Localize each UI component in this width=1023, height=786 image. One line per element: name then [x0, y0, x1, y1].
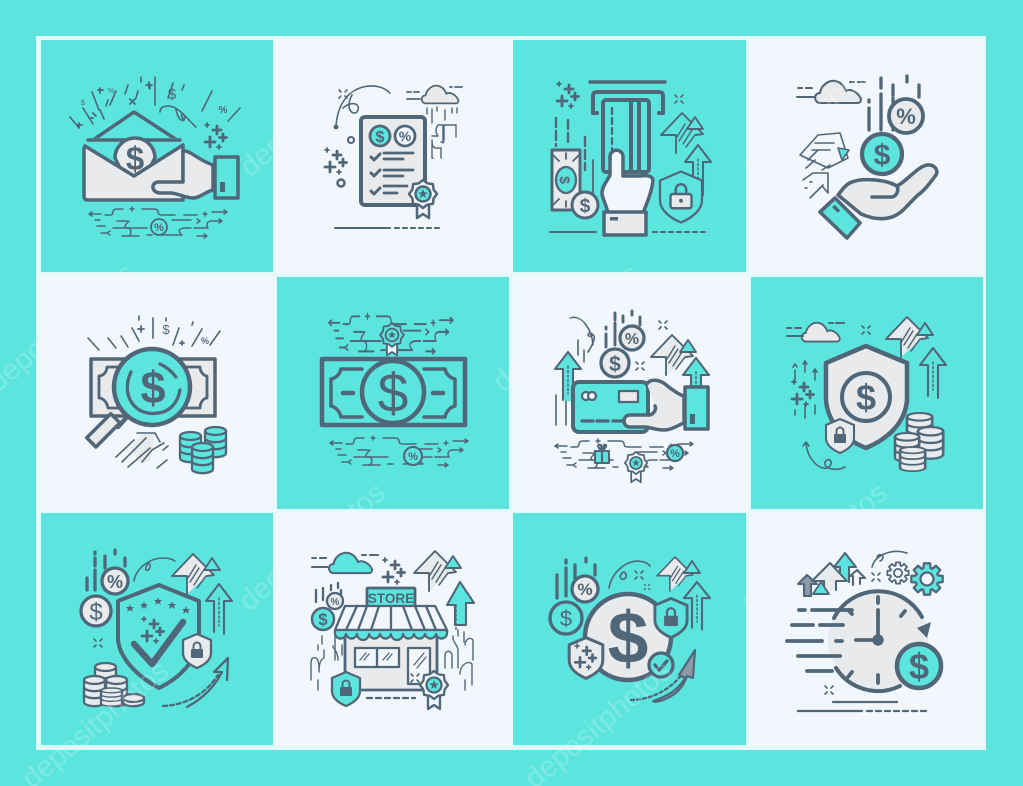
icon: shield with checkmark: %	[107, 572, 123, 592]
envelope body	[84, 145, 183, 200]
icon: card in ATM slot with hand: $	[557, 176, 573, 184]
icon: store front: %	[331, 597, 340, 608]
icon: banknote: $	[378, 362, 408, 424]
money coin	[115, 138, 155, 176]
icon: envelope with money in hand: $	[126, 140, 144, 177]
watermark text: depositphotos	[233, 477, 392, 617]
icon: card in ATM slot with hand: $	[580, 196, 591, 217]
icon: magnifier over banknote: %	[201, 336, 209, 346]
icon: envelope with money in hand: %	[108, 88, 114, 95]
hand	[153, 151, 213, 198]
icon: clock with fast lines: $	[909, 646, 929, 687]
cuff	[215, 157, 238, 198]
icon: banknote	[322, 314, 468, 467]
icon: shield with coin and stacks	[787, 317, 946, 471]
icon: magnifier over banknote: $	[162, 322, 170, 337]
icon: banknote: %	[408, 451, 418, 463]
icon: credit card in hand: %	[625, 331, 639, 348]
envelope back flap	[93, 112, 177, 140]
watermark text: depositphotos	[234, 43, 393, 183]
icon: store front: STORE	[368, 591, 414, 606]
icon: credit card in hand: $	[609, 353, 621, 376]
icon: card in ATM slot with hand	[550, 82, 711, 235]
icon: hand holding coins: %	[896, 104, 916, 129]
icon: clock with fast lines	[787, 551, 943, 711]
icon: shield with coin and stacks: $	[856, 377, 876, 418]
icon: document checklist with badge: %	[399, 128, 412, 144]
icon: envelope with money in hand	[70, 77, 240, 238]
watermark text: depositphotos	[735, 477, 894, 617]
icon: hand holding coins: $	[874, 139, 891, 172]
icon: dollar coin with shields: %	[577, 580, 593, 599]
icon: credit card in hand: %	[670, 448, 680, 460]
icon: magnifier over banknote	[87, 316, 226, 473]
icon: dollar coin with shields	[550, 557, 710, 702]
icon: document checklist with badge: $	[376, 129, 385, 146]
icon: store front	[311, 551, 474, 709]
icon: credit card in hand	[555, 311, 709, 482]
watermark text: depositphotos	[487, 258, 646, 398]
icon: envelope with money in hand: %	[219, 105, 228, 116]
icon: dollar coin with shields: $	[560, 606, 572, 631]
icon: envelope with money in hand: $	[81, 100, 85, 107]
icon: hand holding coins	[797, 76, 937, 238]
icon: magnifier over banknote: $	[140, 362, 166, 413]
watermark text: depositphotos	[736, 43, 895, 183]
icon: dollar coin with shields: $	[608, 598, 648, 679]
icon: envelope with money in hand: $	[168, 86, 177, 103]
icon: shield with checkmark	[81, 550, 232, 707]
icon: store front: $	[318, 610, 328, 629]
icon: envelope with money in hand: %	[154, 222, 164, 234]
icon: shield with checkmark: $	[89, 599, 103, 626]
icon: document checklist with badge	[325, 86, 462, 228]
